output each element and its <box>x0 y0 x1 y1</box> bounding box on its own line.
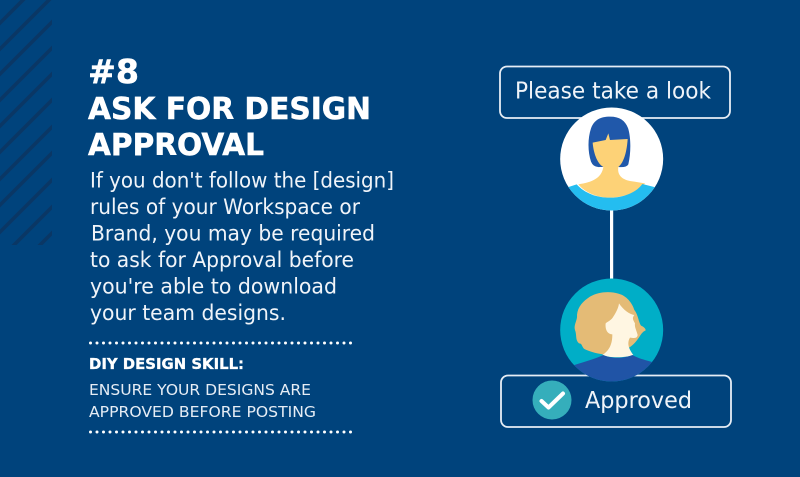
title: APPROVAL <box>88 128 264 163</box>
request speech box: Please take a look <box>515 79 712 105</box>
title: ASK FOR DESIGN <box>88 92 371 127</box>
body text: you're able to download <box>90 274 337 298</box>
title <box>88 52 371 163</box>
approved box <box>501 376 731 427</box>
body text: If you don't follow the [design] <box>90 168 394 192</box>
body text: your team designs. <box>90 301 286 325</box>
dotted rule top <box>90 342 351 344</box>
request speech box <box>500 66 730 118</box>
body text: Brand, you may be required <box>91 222 375 246</box>
skill text: APPROVED BEFORE POSTING <box>89 403 316 421</box>
skill text <box>89 381 316 421</box>
avatar: requester <box>560 108 664 210</box>
avatar: approver <box>560 278 664 382</box>
body text: to ask for Approval before <box>90 248 354 272</box>
skill text: ENSURE YOUR DESIGNS ARE <box>89 381 311 399</box>
body text: rules of your Workspace or <box>90 195 360 219</box>
body text <box>90 168 394 325</box>
approved box: Approved <box>585 388 692 414</box>
connector line <box>610 205 613 285</box>
skill heading: DIY DESIGN SKILL: <box>89 355 244 373</box>
title: #8 <box>88 52 139 91</box>
dotted rule bottom <box>90 430 351 434</box>
